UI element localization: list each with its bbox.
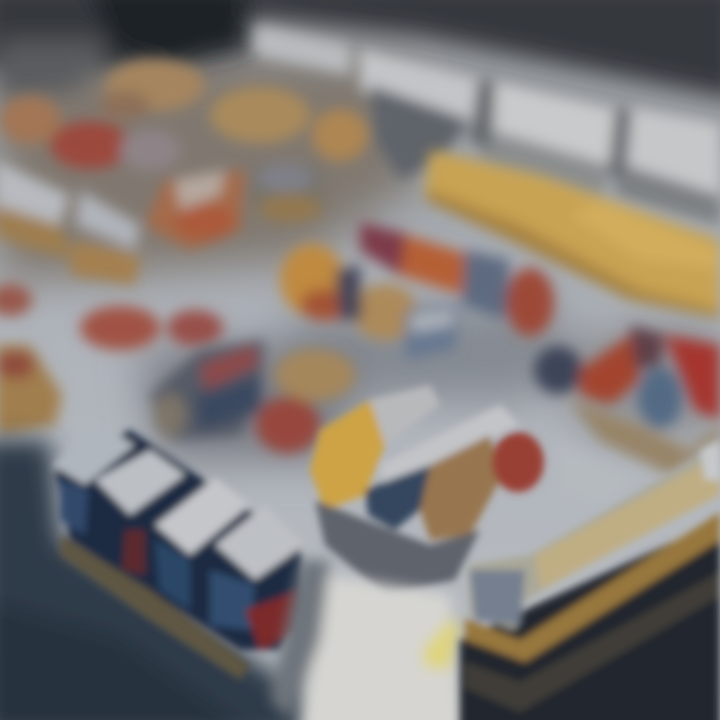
right coloured pallet: [534, 325, 720, 510]
yellow pallet row, top right: [425, 150, 720, 318]
centre coloured crates: [280, 222, 554, 360]
front-left blue crates with white tops: [52, 425, 305, 680]
front pallet with yellow and blue crates: [310, 385, 544, 595]
upper-left crates: [0, 59, 368, 285]
bottom centre floor light patch: [270, 560, 462, 720]
floor shadows: [0, 60, 720, 460]
bottom-left dark floor: [0, 440, 310, 720]
bottom-right large pallet: [460, 440, 720, 720]
back wall dark band: [0, 0, 720, 100]
top row of white crates: [255, 25, 720, 225]
central mixed pallet: [150, 340, 355, 453]
left-middle red crates: [0, 284, 223, 435]
